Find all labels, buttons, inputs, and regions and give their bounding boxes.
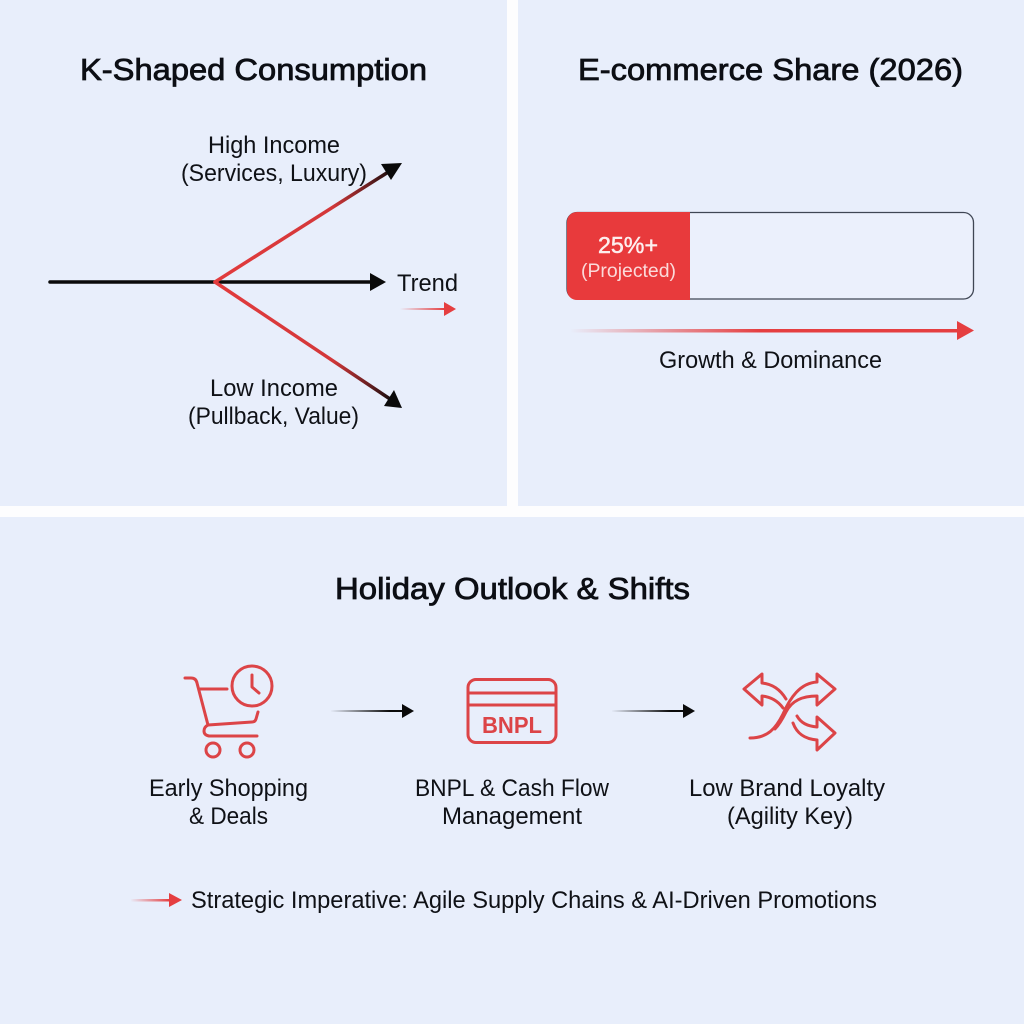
label: high income <box>181 132 367 187</box>
label: projected: (Projected) <box>581 261 676 282</box>
label: BNPL and cash flow: BNPL & Cash Flow <box>415 775 610 802</box>
heading: K-Shaped Consumption: K-Shaped Consumption <box>80 52 427 87</box>
callout: strategic imperative: Strategic Imperative: Agile Supply Chains & AI-Driven Promotions <box>191 887 877 914</box>
panel: K-shaped consumption <box>0 0 507 506</box>
icon: shopping cart with clock <box>185 666 272 757</box>
arrow: trend baseline <box>50 273 386 291</box>
heading: Holiday Outlook & Shifts: Holiday Outlook & Shifts <box>335 571 690 606</box>
arrow: growth <box>570 321 974 340</box>
label: BNPL and cash flow: Management <box>442 803 582 830</box>
arrow: strategic imperative marker <box>131 893 182 907</box>
panel: holiday outlook <box>0 517 1024 1024</box>
arrow: step one to two <box>331 704 414 718</box>
icon: crossing arrows <box>744 674 835 750</box>
progress bar <box>567 212 974 300</box>
label: early shopping: Early Shopping <box>149 775 308 802</box>
label: early shopping <box>149 775 308 830</box>
label: early shopping: & Deals <box>189 803 268 830</box>
label: low income: (Pullback, Value) <box>188 403 359 430</box>
label: trend: Trend <box>397 270 458 297</box>
arrow: low income branch <box>215 282 402 408</box>
arrow: small red trend <box>400 302 456 316</box>
label: low brand loyalty: (Agility Key) <box>727 803 853 830</box>
arrow: step two to three <box>612 704 695 718</box>
label: low income <box>188 375 359 430</box>
label: high income: (Services, Luxury) <box>181 160 367 187</box>
value: 25%+: 25%+ <box>598 232 658 258</box>
heading: E-commerce Share (2026): E-commerce Share (2026) <box>578 52 963 87</box>
icon: BNPL card <box>468 680 556 742</box>
label: low brand loyalty: Low Brand Loyalty <box>689 775 885 802</box>
label: low brand loyalty <box>689 775 885 830</box>
label: high income: High Income <box>208 132 340 159</box>
bar fill: 25% projected <box>567 212 690 300</box>
arrow: high income branch <box>215 163 402 282</box>
icon: BNPL card: BNPL <box>482 712 542 738</box>
label: growth and dominance: Growth & Dominance <box>659 347 882 374</box>
panel: e-commerce share <box>518 0 1024 506</box>
label: BNPL and cash flow <box>415 775 610 830</box>
label: low income: Low Income <box>210 375 338 402</box>
